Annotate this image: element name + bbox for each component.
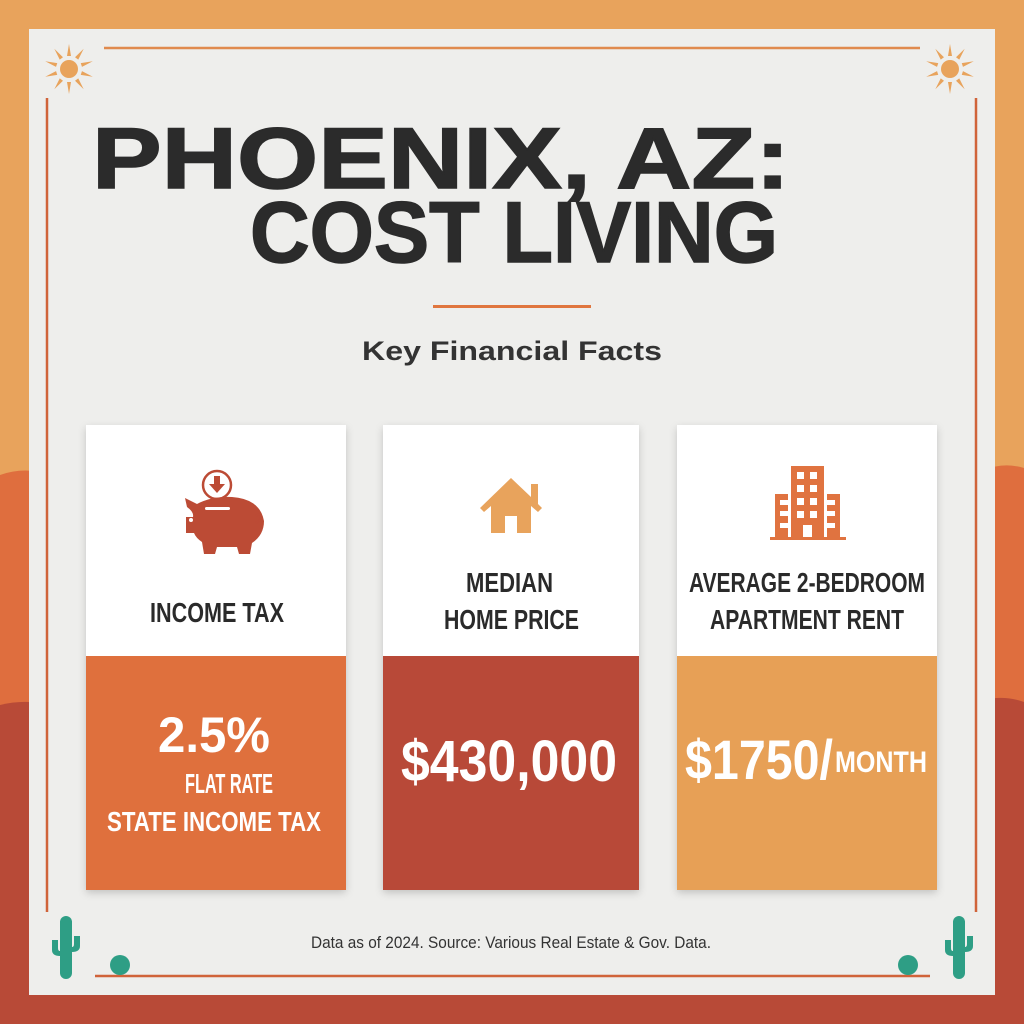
label: income tax: INCOME TAX xyxy=(150,597,284,628)
title: PHOENIX, AZ: xyxy=(92,111,790,207)
label: rent: AVERAGE 2-BEDROOM xyxy=(689,567,925,598)
panel: rent card xyxy=(677,425,937,890)
value: 2.5% flat rate: FLAT RATE xyxy=(185,768,273,799)
value: 2.5% flat rate: STATE INCOME TAX xyxy=(107,806,321,837)
label: median home price: HOME PRICE xyxy=(444,604,579,635)
panel: income tax card xyxy=(86,425,346,890)
footer source: Data as of 2024. Source: Various Real Estate & Gov. Data. xyxy=(311,933,711,952)
icon: house xyxy=(480,478,542,533)
title: COST LIVING xyxy=(250,185,778,281)
label: rent xyxy=(689,567,925,635)
panel: median home price card xyxy=(383,425,639,890)
icon: cactus left xyxy=(52,916,130,979)
value: $430,000: $430,000 xyxy=(401,729,617,794)
value: $1750/month: MONTH xyxy=(835,746,927,779)
value: $1750/month: $1750/ xyxy=(685,728,833,791)
label: median home price: MEDIAN xyxy=(466,567,553,598)
icon: sun right xyxy=(926,44,974,94)
icon: building xyxy=(770,466,846,540)
title xyxy=(92,111,790,281)
icon: cactus right xyxy=(898,916,973,979)
subtitle: Key Financial Facts xyxy=(362,336,662,366)
icon: sun left xyxy=(45,44,93,94)
label: median home price xyxy=(444,567,579,635)
value: 2.5% flat rate: 2.5% xyxy=(158,707,270,763)
value: 2.5% flat rate xyxy=(107,707,321,837)
label: rent: APARTMENT RENT xyxy=(710,604,904,635)
icon: piggy bank xyxy=(185,471,264,554)
divider accent xyxy=(433,305,591,308)
